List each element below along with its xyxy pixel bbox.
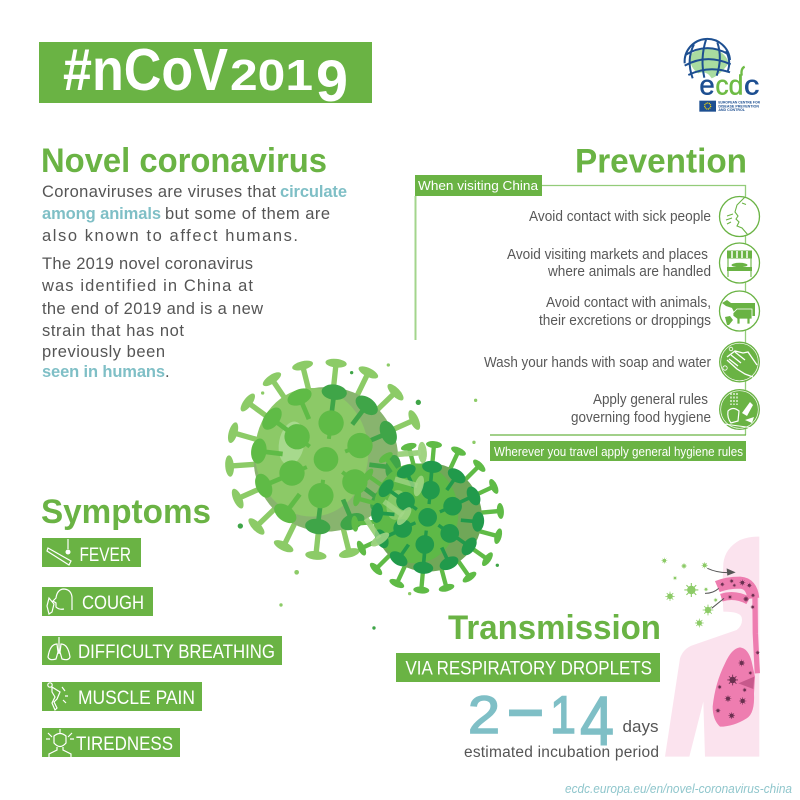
symptom: muscle pain: MUSCLE PAIN (78, 687, 195, 709)
text block: novel coronavirus description: among animals (42, 205, 161, 223)
respiratory system illustration (661, 537, 760, 757)
title (39, 37, 372, 114)
ecdc logo: c (744, 69, 759, 100)
item: animals: their excretions or droppings (539, 313, 711, 329)
item: markets (507, 243, 760, 283)
ecdc logo: EUROPEAN CENTRE FOR (718, 101, 761, 105)
callout: general hygiene (490, 441, 746, 461)
incubation period number: – (508, 680, 543, 739)
ecdc logo: AND CONTROL (718, 108, 745, 112)
symptom: difficulty breathing (42, 636, 282, 665)
text block: novel coronavirus description: . (165, 363, 170, 381)
text block: novel coronavirus description: but some of them are (165, 205, 330, 223)
symptom: cough (42, 587, 153, 616)
item: food hygiene: governing food hygiene (571, 410, 711, 426)
panel: symptoms (42, 538, 282, 757)
item: sick people (529, 196, 760, 236)
incubation period number: 1 (550, 686, 576, 745)
text block: novel coronavirus description (41, 183, 347, 381)
symptom: muscle pain (42, 682, 202, 711)
large virus (225, 358, 427, 561)
text block: novel coronavirus description: previously been (42, 343, 165, 361)
item: markets: Avoid visiting markets and places (507, 247, 708, 263)
item: sick people: Avoid contact with sick people (529, 209, 711, 225)
symptom: cough: COUGH (82, 592, 144, 614)
text block: novel coronavirus description: also known to affect humans. (42, 227, 298, 245)
ecdc logo: DISEASE PREVENTION (718, 104, 760, 108)
item: animals: Avoid contact with animals, (546, 295, 711, 311)
text block: novel coronavirus description: circulate (280, 183, 347, 201)
text block: novel coronavirus description: The 2019 novel coronavirus (42, 255, 253, 273)
incubation period number: 2 (468, 686, 500, 745)
heading: transmission: Transmission (448, 609, 661, 647)
title: #nCoV (63, 37, 228, 103)
item: wash hands (484, 342, 760, 382)
when visiting china label (415, 175, 542, 196)
panel: prevention (415, 175, 760, 435)
text block: novel coronavirus description: was identified in China at (41, 277, 253, 295)
heading: prevention: Prevention (575, 142, 747, 180)
text block: novel coronavirus description: the end of 2019 and is a new (42, 300, 263, 318)
text block: novel coronavirus description: Coronaviruses are viruses that (42, 183, 276, 201)
when visiting china label: When visiting China (418, 178, 539, 193)
coronavirus illustration (225, 358, 505, 630)
symptom: difficulty breathing: DIFFICULTY BREATHING (78, 641, 275, 663)
symptom: fever: FEVER (80, 544, 131, 566)
symptom: tiredness (42, 728, 180, 757)
heading: symptoms: Symptoms (41, 493, 211, 531)
ecdc logo (685, 39, 761, 112)
symptom: tiredness: TIREDNESS (76, 733, 173, 755)
symptom: fever (42, 538, 141, 567)
transmission route label: VIA RESPIRATORY DROPLETS (406, 658, 652, 680)
item: food hygiene (571, 389, 760, 430)
ecdc logo: cd (715, 69, 743, 100)
text block: novel coronavirus description: strain that has not (42, 322, 184, 340)
item: animals (539, 291, 760, 331)
title: 201 (230, 51, 313, 100)
item: wash hands: Wash your hands with soap and water (484, 355, 711, 371)
incubation period number: days (622, 717, 658, 736)
ecdc logo: e (699, 69, 715, 100)
heading: novel coronavirus: Novel coronavirus (41, 142, 327, 180)
title: 9 (316, 49, 348, 114)
incubation period number: 4 (580, 682, 614, 760)
incubation period number: estimated incubation period (464, 744, 659, 761)
transmission route label (396, 653, 660, 682)
callout: general hygiene: Wherever you travel apply general hygiene rules (494, 445, 743, 459)
item: markets: where animals are handled (547, 264, 711, 280)
item: food hygiene: Apply general rules (593, 392, 708, 408)
small virus (351, 440, 505, 594)
incubation period number (464, 680, 659, 761)
text block: novel coronavirus description: seen in humans (42, 363, 165, 381)
